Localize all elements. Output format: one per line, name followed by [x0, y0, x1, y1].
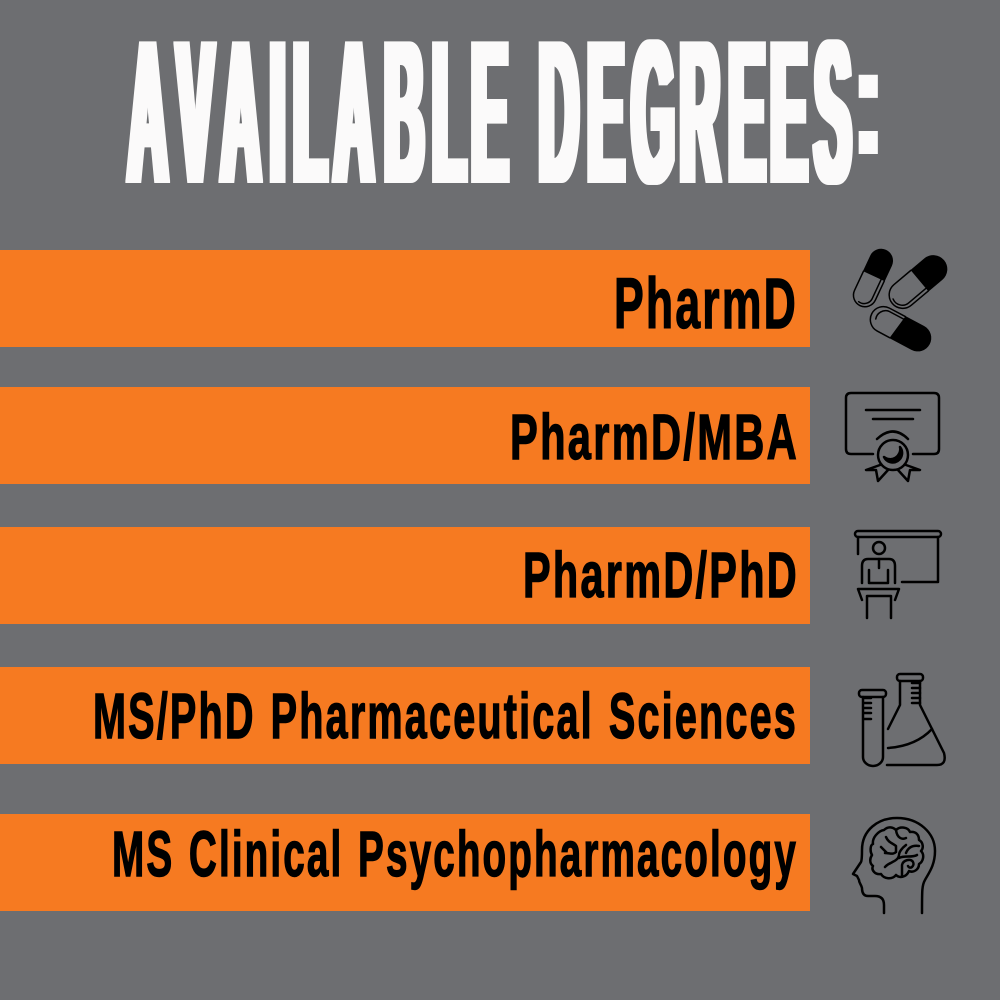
bar: PharmD — [0, 250, 810, 347]
bar: PharmD/PhD — [0, 527, 810, 624]
bar: PharmD/PhD: PharmD/PhD — [523, 539, 799, 611]
bar: MS/PhD Pharmaceutical Sciences — [0, 667, 810, 764]
bar: MS Clinical Psychopharmacology — [0, 814, 810, 911]
bar: PharmD/MBA: PharmD/MBA — [510, 401, 799, 473]
icon: test tube and flask — [859, 674, 945, 766]
bar: PharmD: PharmD — [614, 265, 798, 344]
icon: head with brain — [853, 818, 935, 913]
icon: diploma certificate — [846, 393, 939, 481]
icon: lecturer at podium — [855, 531, 941, 618]
icon: capsules — [849, 245, 953, 356]
title: : — [855, 15, 881, 186]
title: AVAILABLE DEGREES — [128, 0, 851, 226]
bar: PharmD/MBA — [0, 387, 810, 484]
